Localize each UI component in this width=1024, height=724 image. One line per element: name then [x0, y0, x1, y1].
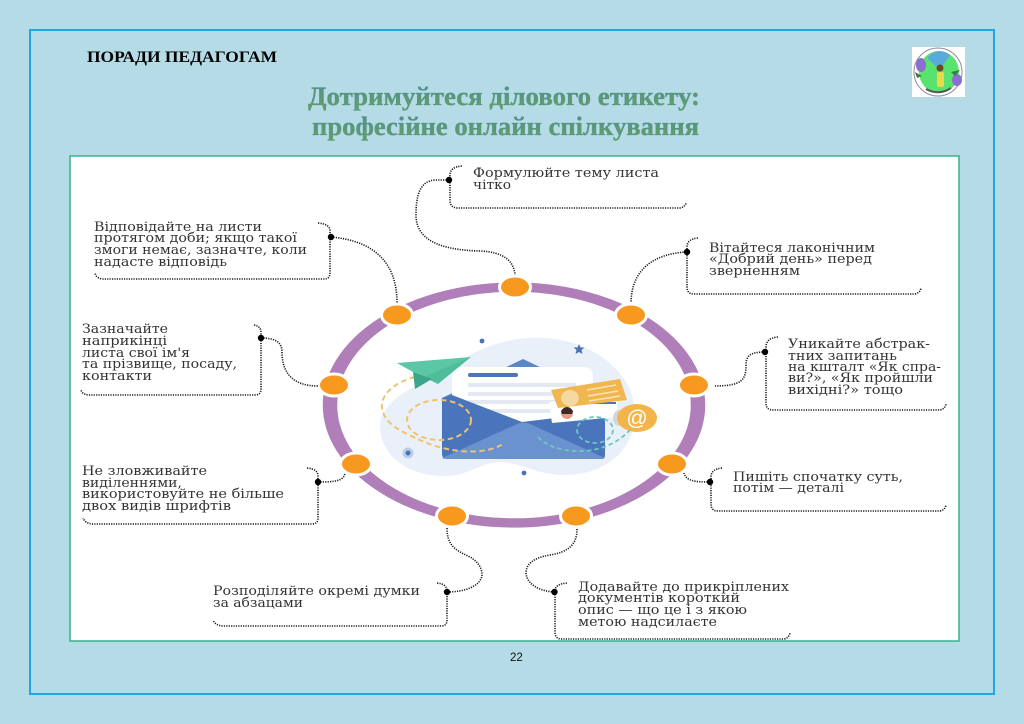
callout: subject line — [416, 165, 686, 275]
callout: greeting — [631, 238, 921, 302]
callout: attachments: Додавайте до прикріплених — [578, 579, 789, 594]
callout: paragraphs: за абзацами — [213, 595, 303, 610]
callout: attachments: документів короткий — [578, 590, 740, 605]
callout: signature: наприкінці — [82, 333, 167, 348]
callout: emphasis and fonts: виділеннями, — [82, 475, 182, 490]
callout: abstract questions: Уникайте абстрак- — [788, 336, 930, 351]
panel: white diagram panel — [70, 156, 959, 641]
callout: emphasis and fonts: використовуйте не більше — [82, 486, 284, 501]
callout: signature — [81, 321, 318, 395]
callout: reply in time: надасте відповідь — [94, 254, 227, 269]
callout: attachments — [526, 529, 790, 639]
callout: abstract questions: тних запитань — [788, 348, 897, 363]
title — [308, 81, 700, 141]
callout: signature: контакти — [82, 368, 152, 383]
orange ring nodes — [318, 276, 710, 527]
ring — [330, 287, 698, 523]
callout: emphasis and fonts: двох видів шрифтів — [82, 498, 231, 513]
icon: round logo — [912, 47, 965, 97]
callout: abstract questions — [714, 336, 946, 410]
callout: signature: листа свої ім'я — [82, 345, 190, 360]
callout: emphasis and fonts — [82, 463, 345, 524]
central illustration: envelope: @ — [626, 407, 648, 430]
callout: paragraphs — [213, 528, 482, 626]
callout: reply in time: змоги немає, зазначте, коли — [94, 242, 307, 257]
callout: reply in time: Відповідайте на листи — [94, 219, 262, 234]
title: Дотримуйтеся ділового етикету: — [308, 81, 700, 111]
callout: attachments: метою надсилаєте — [578, 614, 717, 629]
callout: essence first: Пишіть спочатку суть, — [733, 469, 903, 484]
callout: paragraphs: Розподіляйте окремі думки — [213, 583, 420, 598]
callout: subject line: чітко — [473, 177, 511, 192]
callout: greeting: Вітайтеся лаконічним — [709, 240, 875, 255]
title: професійне онлайн спілкування — [312, 111, 699, 141]
callout: signature: та прізвище, посаду, — [82, 356, 237, 371]
callout: essence first: потім — деталі — [733, 480, 844, 495]
callout: abstract questions: вихідні?» тощо — [788, 382, 903, 397]
central illustration: envelope — [380, 338, 657, 476]
heading: section label: ПОРАДИ ПЕДАГОГАМ — [87, 49, 277, 66]
callout: reply in time — [94, 219, 397, 303]
callout: abstract questions: ви?», «Як пройшли — [788, 370, 933, 385]
callout: subject line: Формулюйте тему листа — [473, 165, 660, 180]
callout: greeting: «Добрий день» перед — [709, 251, 872, 266]
callout: signature: Зазначайте — [82, 321, 168, 336]
callout: essence first — [684, 468, 946, 511]
callout: reply in time: протягом доби; якщо такої — [94, 230, 297, 245]
callout: attachments: опис — що це і з якою — [578, 602, 747, 617]
callout: greeting: зверненням — [709, 263, 800, 278]
callout: abstract questions: на кшталт «Як спра- — [788, 359, 941, 374]
callout: emphasis and fonts: Не зловживайте — [82, 463, 207, 478]
page number: 22 — [510, 652, 523, 664]
